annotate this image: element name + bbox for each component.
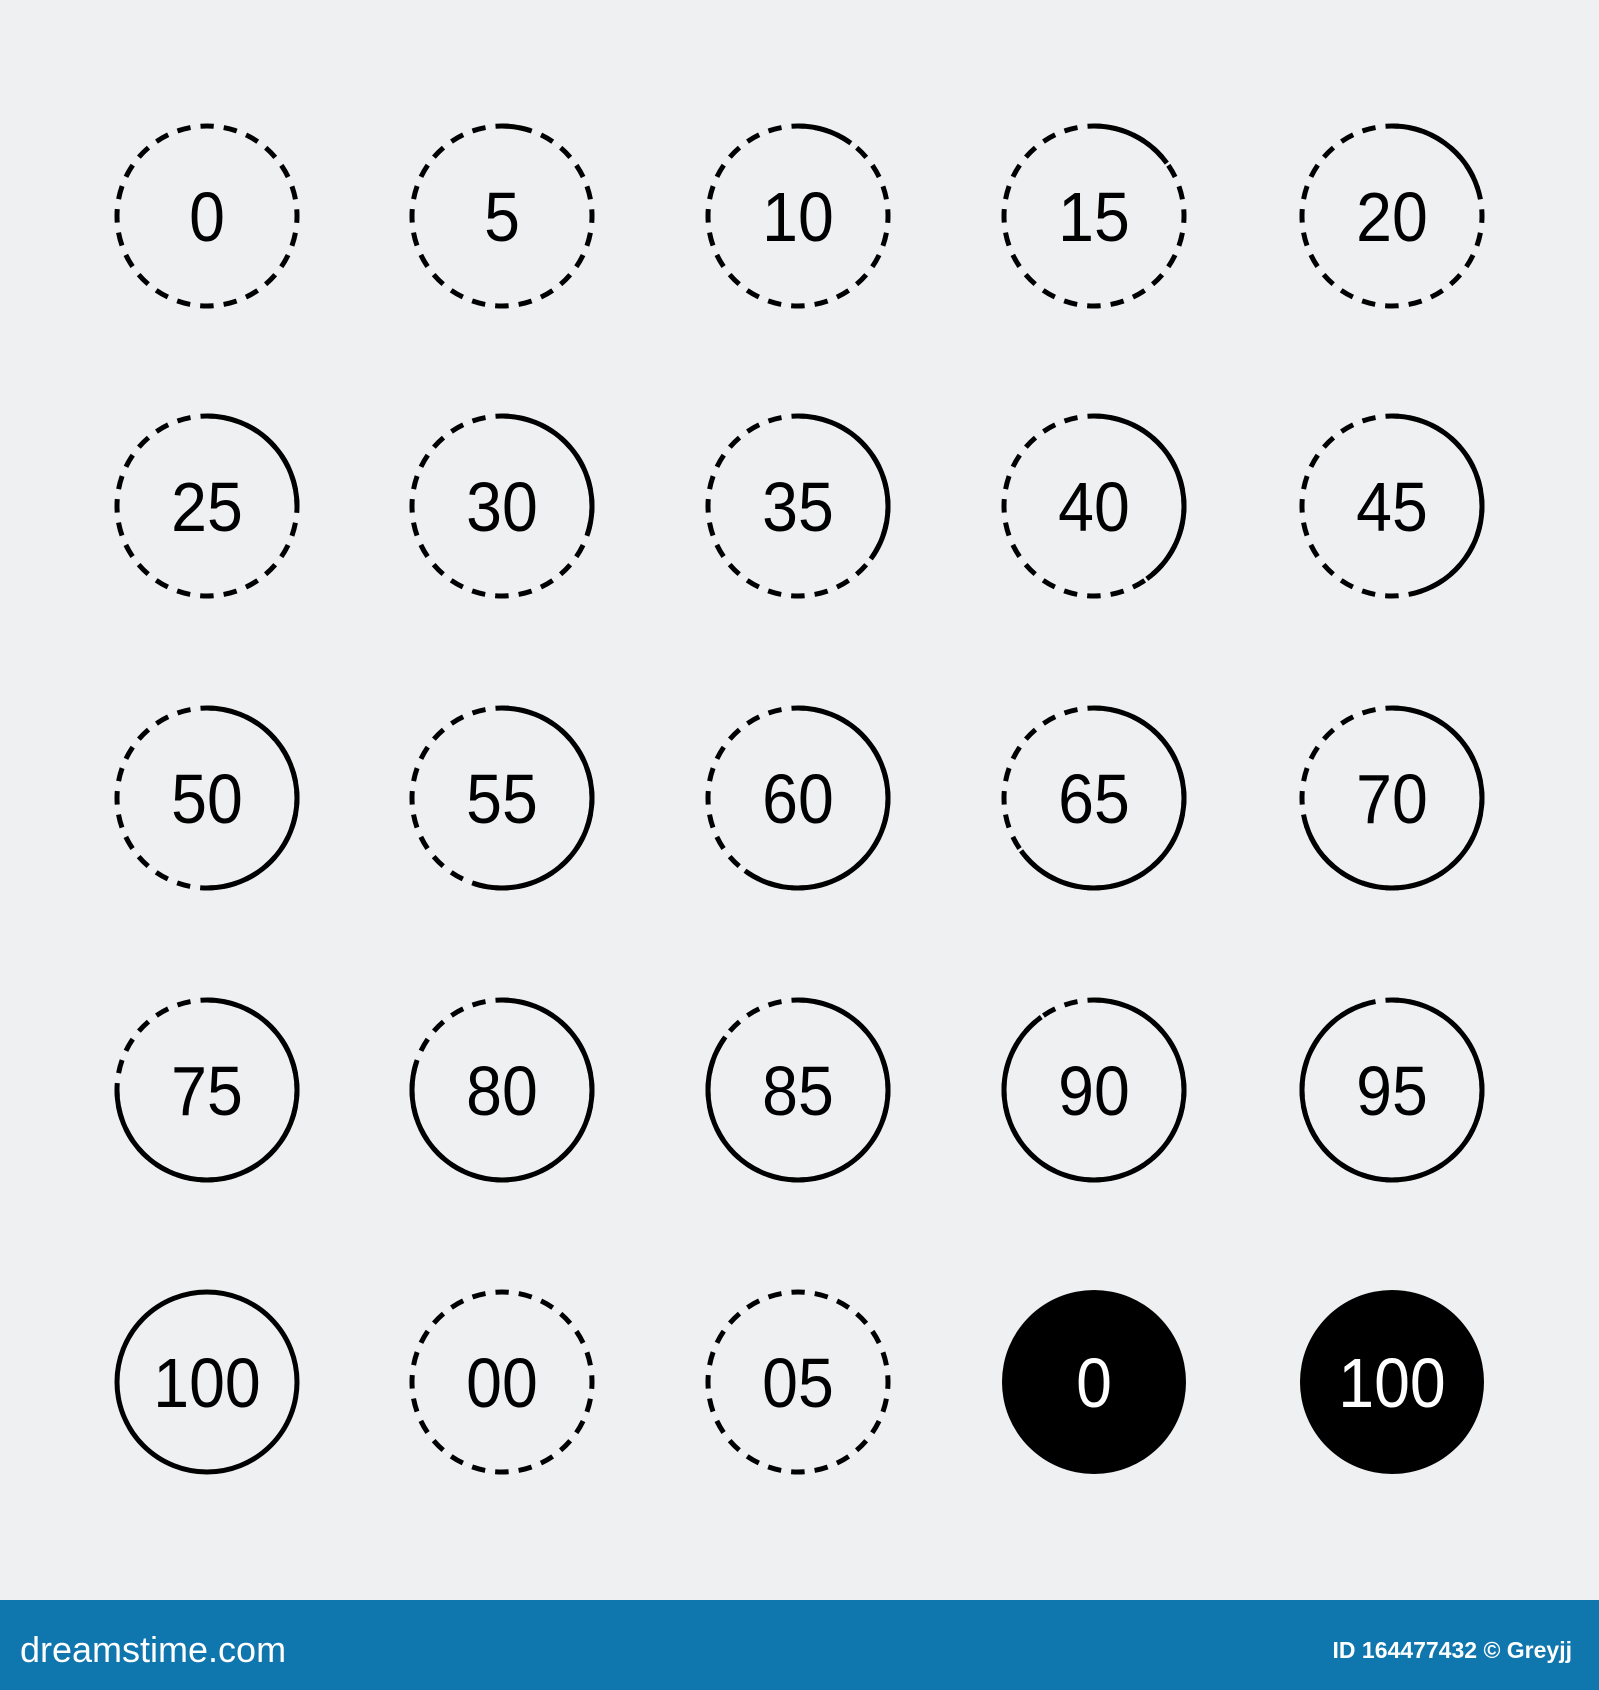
icon: 25 (117, 416, 297, 596)
icon: 95 (1302, 1000, 1482, 1180)
icon: 0: 0 (189, 179, 225, 257)
icon: 95: 95 (1356, 1053, 1428, 1131)
icon: 30 (412, 416, 592, 596)
icon: 65: 65 (1058, 761, 1130, 839)
icon: 0 (117, 126, 297, 306)
icon: 75: 75 (171, 1053, 243, 1131)
icon: 35: 35 (762, 469, 834, 547)
icon: filled 0: 0 (1076, 1345, 1112, 1423)
icon: 15 (1004, 126, 1184, 306)
footer bar (0, 1600, 1599, 1690)
icon: 80: 80 (466, 1053, 538, 1131)
icon: 80 (412, 1000, 592, 1180)
icon: 85 (708, 1000, 888, 1180)
icon: 15: 15 (1058, 179, 1130, 257)
icon: 05: 05 (762, 1345, 834, 1423)
icon: 30: 30 (466, 469, 538, 547)
icon: 90 (1004, 1000, 1184, 1180)
icon: 90: 90 (1058, 1053, 1130, 1131)
icon: 00: 00 (466, 1345, 538, 1423)
icon: 45 (1302, 416, 1482, 596)
grid: progress icons (117, 126, 1484, 1474)
icon: 50: 50 (171, 761, 243, 839)
icon: filled 0 (1002, 1290, 1186, 1474)
icon: 5 (412, 126, 592, 306)
icon: 60: 60 (762, 761, 834, 839)
footer logo text: dreamstime.com (20, 1629, 286, 1670)
icon: 20 (1302, 126, 1482, 306)
icon: 75 (117, 1000, 297, 1180)
icon: 05 (708, 1292, 888, 1472)
icon: 100 (117, 1292, 297, 1472)
icon: filled 100 (1300, 1290, 1484, 1474)
icon: 55: 55 (466, 761, 538, 839)
footer credit: ID 164477432 © Greyjj (1333, 1637, 1572, 1663)
icon: filled 100: 100 (1338, 1345, 1446, 1423)
icon: 20: 20 (1356, 179, 1428, 257)
icon: 50 (117, 708, 297, 888)
icon: 10 (708, 126, 888, 306)
icon: 100: 100 (153, 1345, 261, 1423)
icon: 65 (1004, 708, 1184, 888)
icon: 10: 10 (762, 179, 834, 257)
icon: 25: 25 (171, 469, 243, 547)
icon: 70: 70 (1356, 761, 1428, 839)
icon: 00 (412, 1292, 592, 1472)
icon: 40: 40 (1058, 469, 1130, 547)
icon: 35 (708, 416, 888, 596)
icon: 5: 5 (484, 179, 520, 257)
icon: 60 (708, 708, 888, 888)
icon: 70 (1302, 708, 1482, 888)
icon: 45: 45 (1356, 469, 1428, 547)
icon: 40 (1004, 416, 1184, 596)
icon: 85: 85 (762, 1053, 834, 1131)
icon: 55 (412, 708, 592, 888)
